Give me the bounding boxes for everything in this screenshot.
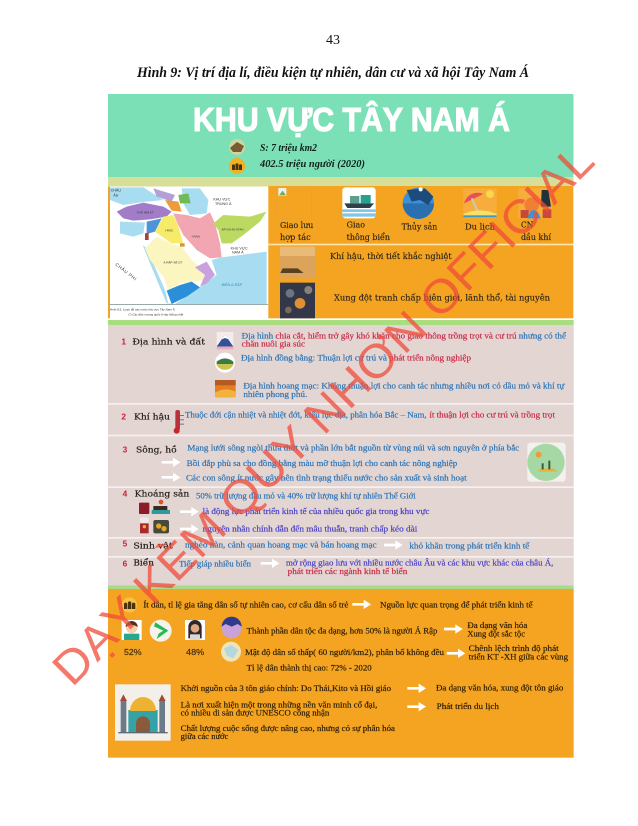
- map labels: Hình 8.5. Lược đồ các nước khu vực Tây Nam Á: [110, 308, 175, 312]
- gender percentages: 52%: [124, 647, 142, 657]
- section 6: sea: [123, 557, 553, 576]
- infographic: [108, 94, 574, 758]
- society text: có nhiều di sản được UNESCO công nhận: [181, 708, 330, 718]
- arrow: [162, 473, 180, 482]
- arrows: [352, 600, 465, 711]
- terrain text: [241, 330, 566, 399]
- arrow: [261, 559, 279, 568]
- area text: S: 7 triệu km2: [260, 143, 318, 154]
- map labels: THỔ NHĨ KỲ: [137, 209, 154, 214]
- climate text: ít thuận lợi cho cư trú và trồng trọt: [429, 410, 556, 420]
- section 6: sea: Tiếp giáp nhiều biển: [179, 559, 252, 569]
- society text: Nguồn lực quan trọng để phát triển kinh tế: [380, 599, 534, 609]
- climate text: Thuộc đới cận nhiệt và nhiệt đới, kiểu lục địa, phân hóa Bắc – Nam,: [185, 410, 427, 420]
- minerals text: nguyên nhân chính dẫn đến mâu thuẫn, tranh chấp kéo dài: [203, 523, 418, 533]
- map labels: ÁP-GA-NI-XTAN: [222, 228, 244, 232]
- section 3: rivers: [123, 443, 566, 482]
- icon: drought: [527, 443, 566, 482]
- society text: Chất lượng cuộc sống được nâng cao, nhưng có sự phân hóa: [181, 723, 395, 733]
- map labels: CHÂU PHI: [114, 262, 138, 282]
- minerals text: là động lực phát triển kinh tế của nhiều quốc gia trong khu vực: [203, 506, 429, 516]
- terrain text: Địa hình chia cắt, hiểm trở gây khó khăn cho giao thông trồng trọt và cư trú nhưng có thể: [242, 330, 566, 340]
- activity labels: hợp tác: [280, 232, 311, 242]
- section 5: biota: Sinh vật: [133, 540, 173, 550]
- rivers text: Mạng lưới sông ngòi thưa thớt và phần lớn bắt nguồn từ vùng núi và sơn nguyên ở phía bắc: [187, 443, 519, 453]
- map labels: BIỂN A-RẬP: [222, 282, 243, 287]
- icon: plains: [215, 353, 235, 373]
- minerals text: [196, 490, 429, 533]
- arrow: [162, 458, 180, 467]
- page number: 43: [326, 33, 340, 48]
- section 5: biota: 5: [123, 539, 128, 549]
- rivers text: Bồi đắp phù sa cho đồng bằng màu mỡ thuận lợi cho canh tác nông nghiệp: [187, 458, 457, 468]
- map labels: NAM Á: [232, 250, 244, 254]
- activity labels: Du lịch: [465, 221, 496, 231]
- caption: Hình 9: Vị trí địa lí, điều kiện tự nhiên, dân cư và xã hội Tây Nam Á: [136, 64, 529, 81]
- activity labels: Thủy sản: [402, 221, 438, 231]
- terrain text: nhiên phong phú.: [243, 389, 307, 399]
- map labels: KHU VỰC: [213, 198, 231, 202]
- section 6: sea: mở rộng giao lưu với nhiều nước châu Âu và các khu vực khác của châu Á,: [286, 558, 553, 568]
- section 6: sea: Biển: [133, 557, 155, 568]
- section 1: terrain: Địa hình và đất: [132, 336, 206, 346]
- terrain text: chăn nuôi gia súc: [242, 339, 305, 349]
- section 6: sea: 6: [123, 559, 128, 569]
- minerals text: 50% trữ lượng dầu mỏ và 40% trữ lượng khí tự nhiên Thế Giới: [196, 490, 416, 500]
- icon: population: [122, 597, 137, 613]
- icon: oil ship: [152, 500, 170, 514]
- panel: header: [108, 94, 574, 186]
- section 3: rivers: 3: [123, 444, 128, 454]
- map labels: TRUNG Á: [215, 202, 232, 206]
- section 3: rivers: Sông, hồ: [136, 444, 177, 454]
- title: KHU VỰC TÂY NAM Á: [193, 101, 510, 138]
- section 4: minerals: Khoáng sản: [135, 489, 190, 499]
- society text: Tỉ lệ dân thành thị cao: 72% - 2020: [247, 663, 372, 673]
- rivers text: Các con sông ít nước gây nên tình trạng thiếu nước cho sản xuất và sinh hoạt: [186, 472, 467, 482]
- icon: girl: [185, 620, 205, 640]
- climate text: [185, 410, 556, 420]
- section 4: minerals: 4: [123, 489, 128, 499]
- icon: fish: [403, 187, 434, 219]
- section 2: climate: [121, 410, 556, 434]
- population text: 402.5 triệu người (2020): [259, 159, 365, 170]
- icon: beach: [463, 188, 497, 218]
- photo: conflict: [280, 283, 315, 318]
- icon: ethnic groups: [222, 617, 242, 638]
- icon: area: [229, 139, 245, 155]
- icon: gas pump: [140, 517, 149, 533]
- icon: desert: [215, 380, 236, 397]
- panel: population and society: [108, 589, 574, 758]
- activity labels: Giao: [347, 220, 365, 230]
- icon: population: [229, 158, 245, 174]
- icon: oil industry: [518, 188, 552, 218]
- section 5: biota: [123, 539, 531, 551]
- arrow: [180, 507, 199, 516]
- section 4: minerals: [123, 489, 429, 534]
- section 5: biota: khó khăn trong phát triển kinh tế: [409, 541, 531, 551]
- society text: Khởi nguồn của 3 tôn giáo chính: Do Thái,Kito và Hồi giáo: [181, 683, 391, 693]
- map of Southwest Asia: [108, 187, 268, 318]
- gender percentages: [124, 647, 205, 657]
- map labels: A-RẬP XÊ-ÚT: [163, 259, 182, 264]
- society text: Phát triển du lịch: [437, 701, 500, 711]
- icon: oil coins: [153, 520, 169, 533]
- icon: broken image: [277, 188, 312, 218]
- arrow: [180, 524, 199, 534]
- terrain text: Địa hình hoang mạc: Không thuận lợi cho canh tác nhưng nhiều nơi có dầu mỏ và khí tự: [243, 380, 565, 390]
- section 2: climate: 2: [121, 411, 126, 421]
- icon: boy: [122, 620, 142, 640]
- activity labels: Giao lưu: [280, 220, 314, 230]
- icon: density map: [221, 642, 241, 662]
- climate text: Khí hậu, thời tiết khắc nghiệt: [330, 250, 452, 261]
- watermark: DẠY KÈM QUY NHƠN OFFICIAL: [42, 133, 604, 695]
- terrain text: Địa hình đồng bằng: Thuận lợi cư trú và phát triển nông nghiệp: [241, 353, 471, 363]
- map labels: KHU VỰC: [231, 246, 248, 250]
- map labels: I-RAN: [192, 234, 200, 238]
- map labels: (*) Các đảo vương quốc A-rập thống nhất: [128, 312, 183, 316]
- icon: mosque: [115, 684, 171, 741]
- rivers text: [186, 443, 519, 482]
- society text: triển KT -XH giữa các vùng: [469, 652, 569, 662]
- panel: activities and challenges: [268, 186, 573, 318]
- icon: ship: [342, 187, 376, 218]
- gender percentages: 48%: [186, 647, 205, 657]
- map labels: ÂU: [113, 193, 119, 198]
- section 5: biota: nghèo nàn, cảnh quan hoang mạc và bán hoang mạc: [185, 540, 377, 550]
- society text: Thành phần dân tộc đa dạng, hơn 50% là người Ả Rập: [247, 625, 437, 635]
- section 1: terrain: 1: [121, 336, 126, 346]
- activity labels: CN: [521, 219, 533, 229]
- icon: mountain: [217, 332, 233, 349]
- icon: fuel pump: [139, 503, 149, 514]
- map labels: I-RẮC: [165, 228, 174, 233]
- activity labels: thông biển: [347, 231, 391, 242]
- section 2: climate: Khí hậu: [134, 411, 171, 421]
- society text: giữa các nước: [181, 731, 228, 741]
- icon: thermometer: [174, 410, 184, 434]
- society text: Mật độ dân số thấp( 60 người/km2), phân bố không đều: [245, 647, 445, 657]
- map labels: CHÂU: [111, 188, 121, 193]
- society text: Đa dạng văn hóa, xung đột tôn giáo: [436, 683, 563, 693]
- society text: [143, 599, 569, 741]
- section 6: sea: phát triển các ngành kinh tế biển: [288, 566, 408, 576]
- photo: harsh climate: [280, 247, 315, 278]
- society text: Là nơi xuất hiện một trong những nền văn minh cổ đại,: [181, 699, 377, 709]
- society text: Ít dân, tỉ lệ gia tăng dân số tự nhiên cao, cơ cấu dân số trẻ: [143, 599, 348, 609]
- section 1: terrain: [121, 330, 566, 399]
- activity labels: dầu khí: [521, 232, 551, 242]
- arrow: [384, 540, 403, 550]
- map labels: [110, 188, 248, 316]
- society text: Chênh lệch trình độ phát: [469, 643, 559, 653]
- activity labels: [280, 219, 551, 242]
- icon: green arrow: [150, 620, 172, 642]
- society text: Đa dạng văn hóa: [467, 620, 527, 630]
- society text: Xung đột sắc tộc: [467, 628, 525, 638]
- panel: natural conditions: [108, 320, 574, 590]
- conflict text: Xung đột tranh chấp biên giới, lãnh thổ, tài nguyên: [334, 292, 551, 303]
